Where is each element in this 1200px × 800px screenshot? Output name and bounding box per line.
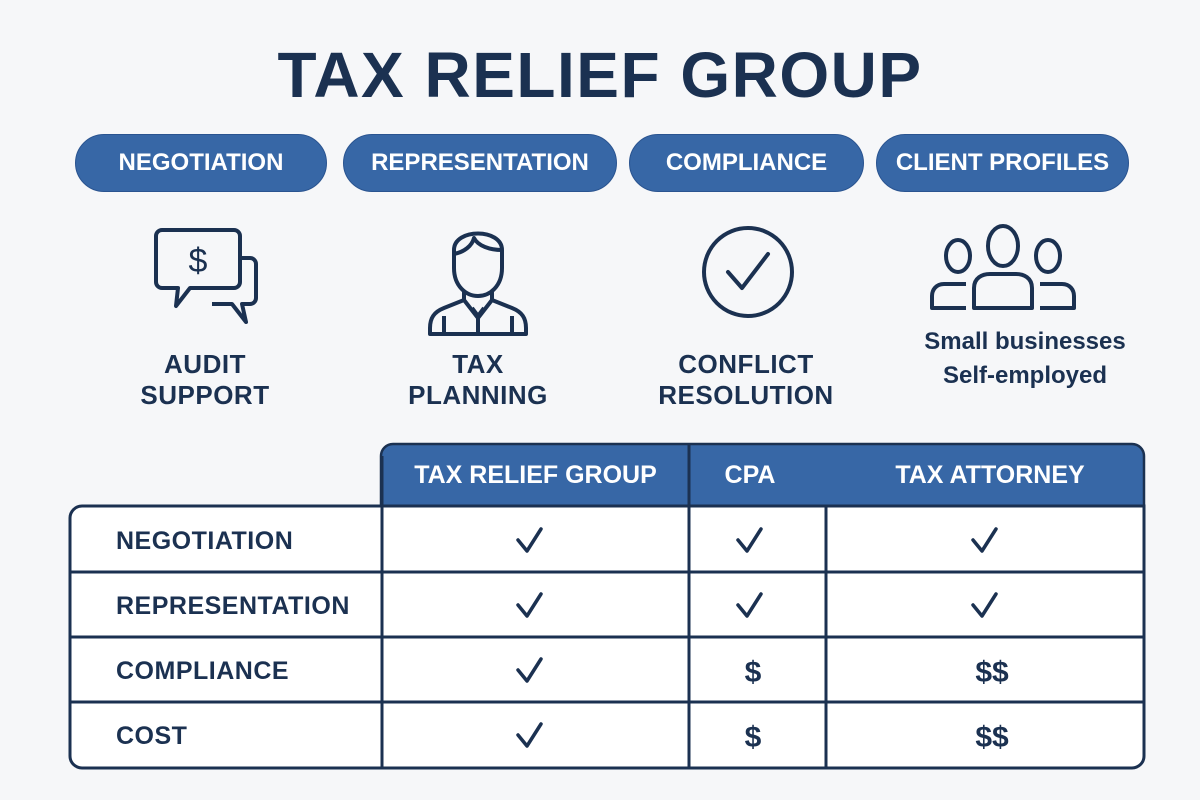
header: cpa: CPA [725, 460, 775, 488]
row label: representation: REPRESENTATION [116, 592, 350, 620]
cell values: $ [745, 721, 761, 754]
row label: cost: COST [116, 722, 187, 750]
label: audit support [140, 349, 270, 410]
label: tax planning [408, 349, 548, 410]
pill: negotiation: NEGOTIATION [119, 149, 283, 176]
header: tax attorney: TAX ATTORNEY [895, 460, 1085, 488]
pill: representation: REPRESENTATION [371, 149, 589, 176]
label: tax planning: TAX [452, 349, 504, 379]
label: client profiles: Self-employed [943, 362, 1107, 389]
header: tax relief group: TAX RELIEF GROUP [414, 460, 657, 488]
pill: representation [343, 134, 617, 192]
icon: speech bubbles with dollar: $ [189, 242, 208, 280]
pill: compliance: COMPLIANCE [666, 149, 827, 176]
icon: person in suit [428, 232, 528, 336]
cell values: $ [745, 656, 761, 689]
label: conflict resolution: CONFLICT [678, 349, 814, 379]
label: conflict resolution [658, 349, 834, 410]
row label: compliance: COMPLIANCE [116, 657, 289, 685]
cell values: $$ [975, 721, 1009, 754]
label: audit support: SUPPORT [140, 380, 270, 410]
pill: negotiation [75, 134, 327, 192]
title: TAX RELIEF GROUP [277, 39, 923, 111]
icon: speech bubbles with dollar [154, 228, 258, 324]
pill: client profiles [876, 134, 1129, 192]
pill: compliance [629, 134, 864, 192]
label: conflict resolution: RESOLUTION [658, 380, 834, 410]
cell values [745, 656, 1009, 754]
pill: client profiles: CLIENT PROFILES [896, 149, 1109, 176]
label: client profiles [924, 328, 1126, 389]
icon: check circle [702, 226, 794, 318]
icon: group of people [930, 224, 1076, 310]
label: client profiles: Small businesses [924, 328, 1126, 355]
label: tax planning: PLANNING [408, 380, 548, 410]
label: audit support: AUDIT [164, 349, 246, 379]
row label: negotiation: NEGOTIATION [116, 527, 293, 555]
cell values: $$ [975, 656, 1009, 689]
